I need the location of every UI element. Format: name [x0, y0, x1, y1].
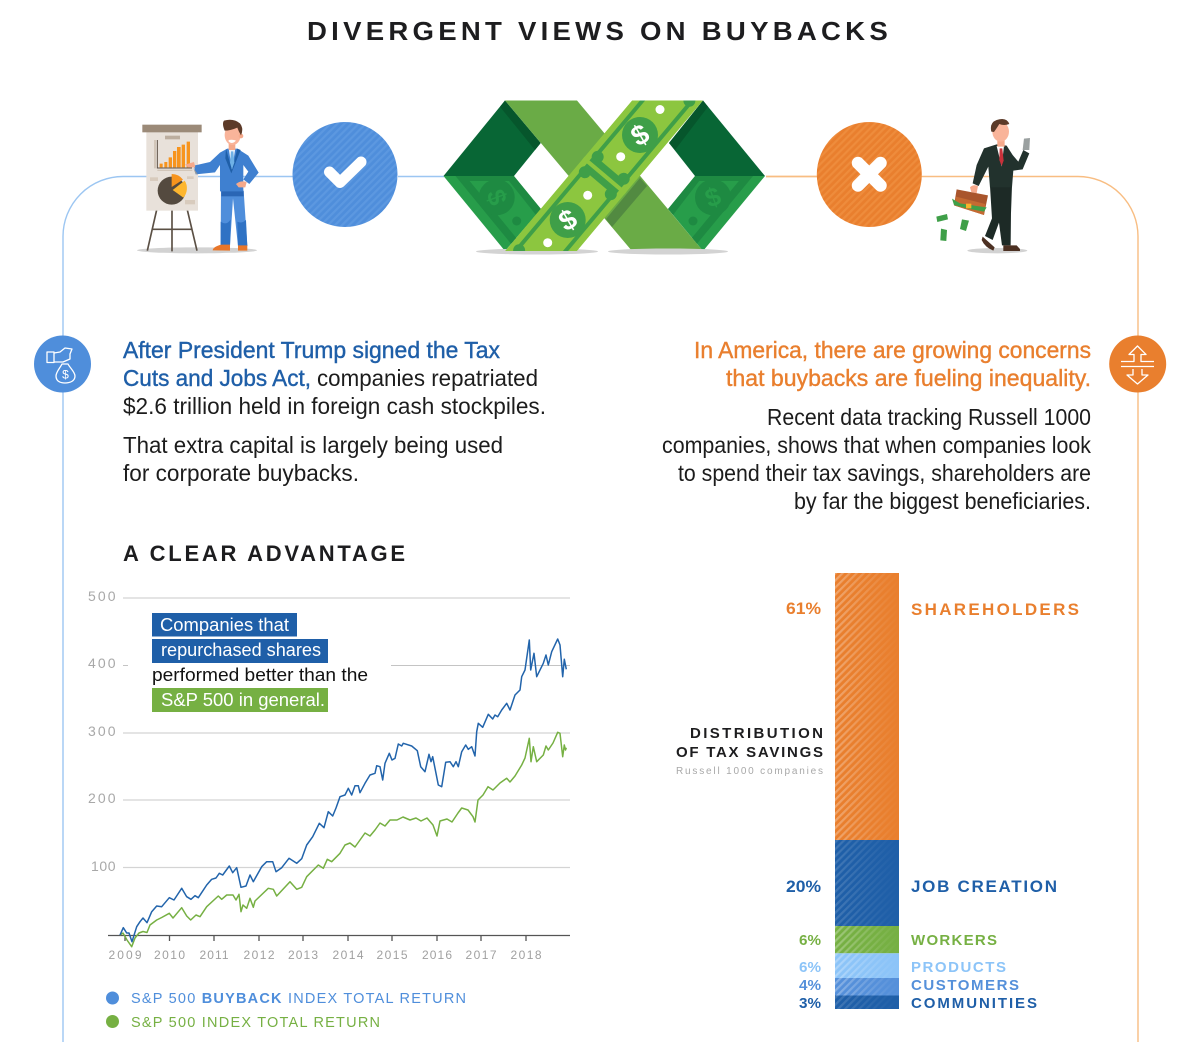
text block: right intro: Recent data tracking Russell 1000: [767, 404, 1091, 430]
callout: annotation: Companies that: [160, 615, 289, 635]
left fold shade: [500, 100, 541, 150]
label: shareholders: SHAREHOLDERS: [911, 600, 1079, 619]
y axis labels: [88, 588, 116, 874]
right diamond upper: [669, 100, 765, 176]
text block: left intro: Cuts and Jobs Act,: [123, 365, 311, 391]
back ribbon: [505, 100, 703, 251]
text block: left intro: for corporate buybacks.: [123, 460, 359, 486]
frame line: right orange: [766, 176, 1138, 1042]
chart title: distribution of tax savings: Russell 1000 companies: [676, 766, 823, 777]
stacked bar: distribution of tax savings: [835, 573, 899, 1009]
illustration: businessman with leaking briefcase: [936, 119, 1030, 253]
frame line: left blue: [63, 176, 293, 1042]
front dollar ribbon: $: [626, 117, 655, 152]
label: products: PRODUCTS: [911, 959, 1006, 976]
right fold shade: [669, 100, 708, 150]
line: S&P 500 buyback index: [120, 639, 566, 942]
label: communities: [799, 995, 1037, 1012]
x axis labels: 2009: [108, 948, 142, 962]
connector line orange segment: [766, 176, 817, 178]
x axis labels: 2013: [288, 948, 318, 962]
label: products: [799, 959, 1006, 976]
chart title: distribution of tax savings: DISTRIBUTION: [690, 725, 823, 742]
shadows under ribbon: [476, 248, 728, 254]
callout: annotation: S&P 500 in general.: [161, 690, 325, 710]
x axis labels: [108, 948, 542, 962]
callout: annotation: [152, 613, 368, 712]
callout: annotation: repurchased shares: [161, 640, 321, 660]
legend: [106, 991, 466, 1031]
icon: check mark circle: [292, 122, 398, 227]
x axis labels: 2017: [466, 948, 497, 962]
right bill: [668, 176, 765, 250]
x axis: [108, 936, 570, 941]
text block: right intro: In America, there are growing concerns: [694, 337, 1091, 363]
legend: buyback index: S&P 500 BUYBACK INDEX TOTAL RETURN: [131, 991, 466, 1007]
left diamond upper: [444, 100, 541, 176]
connector line between check and logo: [398, 176, 444, 178]
x axis labels: 2012: [244, 948, 275, 962]
left bill: $: [480, 185, 514, 210]
text block: left intro: [123, 337, 546, 486]
label: communities: COMMUNITIES: [911, 995, 1037, 1012]
text block: right intro: that buybacks are fueling inequality.: [726, 365, 1091, 391]
callout: annotation: performed better than the: [152, 665, 368, 685]
right bill: $: [701, 180, 725, 214]
label: customers: [799, 977, 1019, 994]
label: job creation: 20%: [786, 877, 821, 896]
text block: left intro: That extra capital is largely being used: [123, 432, 503, 458]
left bill: [444, 176, 541, 249]
label: job creation: JOB CREATION: [911, 877, 1057, 896]
icon: hand with money bag: $: [62, 368, 69, 382]
y axis labels: 500: [88, 588, 116, 604]
line chart: buyback vs S&P 500: [88, 588, 570, 962]
x axis labels: 2015: [376, 948, 408, 962]
text block: left intro: $2.6 trillion held in foreign cash stockpiles.: [123, 393, 546, 419]
illustration: crossed dollar bill ribbon: [444, 100, 765, 254]
label: customers: CUSTOMERS: [911, 977, 1019, 994]
illustration: presenter with chart board: [137, 120, 259, 253]
ribbon shadow: [606, 178, 647, 227]
x axis labels: 2018: [510, 948, 542, 962]
icon: inequality arrows: [1109, 336, 1166, 392]
text block: right intro: [662, 337, 1091, 514]
front dollar ribbon: $: [553, 202, 583, 237]
label: job creation: [786, 877, 1057, 896]
y axis labels: 100: [91, 858, 116, 874]
label: customers: 4%: [799, 977, 821, 994]
front dollar ribbon: [505, 100, 703, 251]
x axis labels: 2014: [332, 948, 364, 962]
label: communities: 3%: [799, 995, 821, 1012]
text block: left intro: After President Trump signed the Tax: [123, 337, 500, 363]
label: products: 6%: [799, 959, 821, 976]
label: workers: 6%: [799, 932, 821, 949]
y axis labels: 400: [88, 655, 116, 671]
label: workers: WORKERS: [911, 932, 997, 949]
legend: S&P 500 index: S&P 500 INDEX TOTAL RETURN: [131, 1015, 380, 1031]
y axis labels: 200: [88, 790, 116, 806]
title: DIVERGENT VIEWS ON BUYBACKS: [307, 16, 892, 46]
icon: cross mark circle: [817, 122, 922, 227]
text block: right intro: by far the biggest beneficiaries.: [794, 488, 1091, 514]
x axis labels: 2011: [200, 948, 229, 962]
x axis labels: 2016: [422, 948, 452, 962]
heading: a clear advantage: A CLEAR ADVANTAGE: [123, 541, 405, 566]
label: shareholders: [786, 599, 1079, 619]
bar labels: [786, 599, 1079, 1012]
label: workers: [799, 932, 997, 949]
chart title: distribution of tax savings: OF TAX SAVINGS: [676, 744, 823, 761]
grid lines: [123, 598, 570, 868]
text block: right intro: to spend their tax savings, shareholders are: [678, 460, 1091, 486]
label: shareholders: 61%: [786, 599, 821, 618]
line: S&P 500 index: [120, 732, 566, 947]
icon: hand with money bag: [34, 336, 91, 392]
x axis labels: 2010: [154, 948, 185, 962]
y axis labels: 300: [88, 723, 116, 739]
text block: left intro: companies repatriated: [317, 365, 538, 391]
chart title: distribution of tax savings: [676, 725, 823, 777]
text block: right intro: companies, shows that when companies look: [662, 432, 1091, 458]
